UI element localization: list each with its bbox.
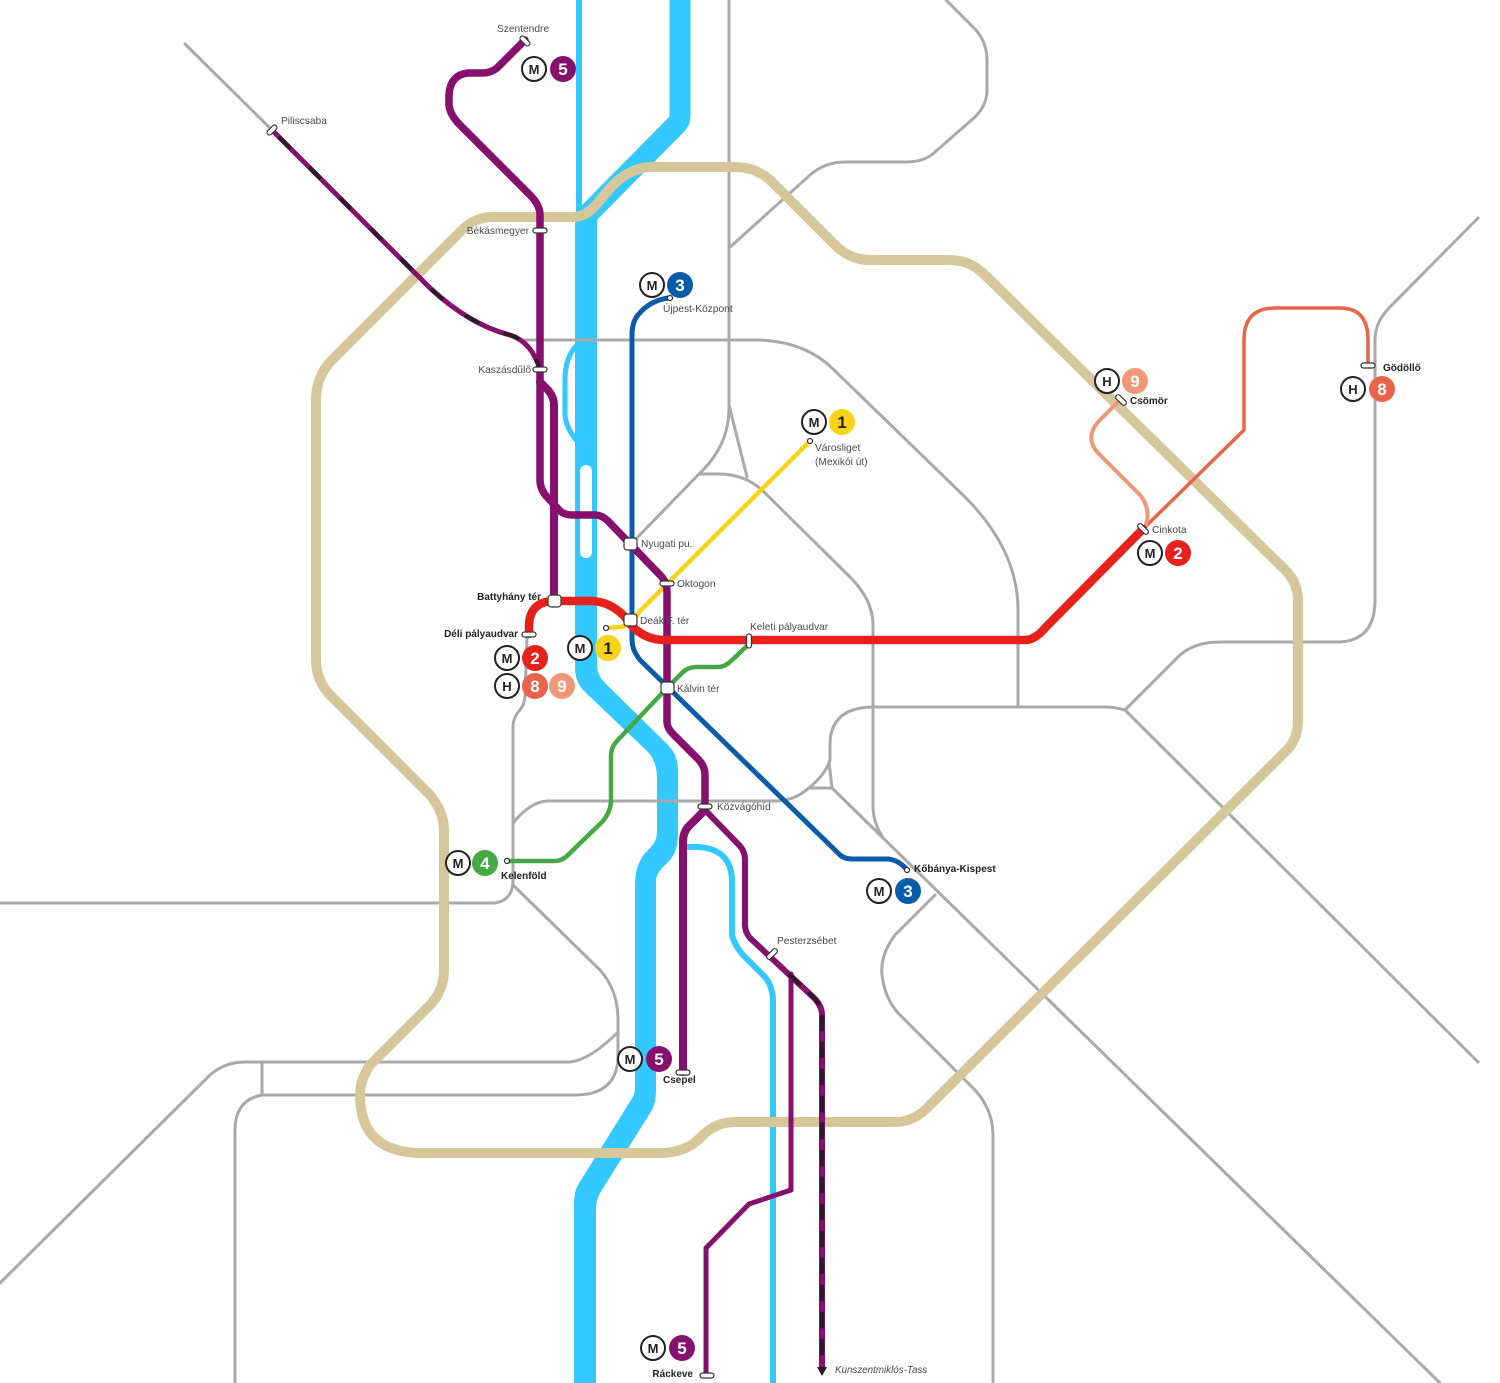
station labels: Kőbánya-Kispest — [914, 864, 996, 875]
station labels: Oktogon — [677, 579, 716, 590]
line H8: suburban railway to Gödöllő — [1143, 308, 1368, 529]
station labels: Gödöllő — [1383, 363, 1421, 374]
badge: M2 Cinkota: 2 — [1173, 544, 1183, 563]
badge: H8 Gödöllő: 8 — [1377, 380, 1387, 399]
station labels: Csepel — [663, 1075, 696, 1086]
badge: H8 Gödöllő — [1341, 376, 1395, 402]
station labels: Újpest-Központ — [663, 302, 733, 315]
station labels: Csömör — [1130, 396, 1168, 407]
line H9: suburban railway to Csömör — [1091, 400, 1148, 527]
badge: M1 Deák tér: M — [575, 641, 585, 656]
badge: M2 Déli pályaudvar: 2 — [530, 649, 540, 668]
line M4: green metro — [507, 645, 748, 861]
ring: tan outer motorway ring — [316, 167, 1298, 1153]
station labels: Piliscsaba — [281, 116, 327, 127]
badge: H9 Csömör: H — [1102, 374, 1112, 389]
station labels: Kálvin tér — [677, 684, 720, 695]
badge: H8 H9 Déli pályaudvar: 8 — [530, 677, 540, 696]
badge: M4 Kelenföld — [446, 850, 498, 876]
badge: M3 Újpest — [640, 272, 693, 298]
station labels: Szentendre — [497, 24, 549, 35]
badge: M5 Ráckeve — [641, 1335, 695, 1361]
badge: M1 Deák tér — [568, 635, 621, 661]
badge: H8 Gödöllő: H — [1348, 382, 1358, 397]
badge: M3 Újpest: M — [647, 278, 657, 293]
badge: M1 Városliget: 1 — [837, 413, 847, 432]
station labels: Keleti pályaudvar — [750, 622, 829, 633]
badge: M5 Ráckeve: 5 — [677, 1339, 687, 1358]
dashes: dark overlay on shared tracks — [280, 138, 822, 1365]
line M3: blue metro — [632, 298, 907, 870]
line M2: red metro — [529, 529, 1143, 640]
station labels: Pesterzsébet — [777, 936, 837, 947]
badge: M3 Kőbánya-Kispest: 3 — [903, 882, 913, 901]
station labels: Békásmegyer — [467, 226, 530, 237]
badge: H9 Csömör: 9 — [1130, 372, 1140, 391]
badge: H8 H9 Déli pályaudvar: 9 — [557, 677, 567, 696]
badge: M2 Déli pályaudvar: M — [502, 651, 512, 666]
badge: M3 Kőbánya-Kispest: M — [874, 884, 884, 899]
badge: M2 Cinkota — [1138, 540, 1191, 566]
badge: M3 Újpest: 3 — [675, 276, 685, 295]
line M5: purple HÉV main route — [272, 40, 822, 1373]
badge: M2 Déli pályaudvar — [495, 645, 548, 671]
station labels: Kunszentmiklós-Tass — [835, 1365, 927, 1376]
badge: M5 Csepel: 5 — [654, 1050, 664, 1069]
badge: M1 Városliget: M — [809, 415, 819, 430]
line M1: yellow metro — [606, 441, 810, 628]
badge: M5 Csepel: M — [625, 1052, 635, 1067]
arrow: towards Kunszentmiklós-Tass — [817, 1367, 827, 1376]
station labels: Cinkota — [1152, 525, 1187, 536]
badge: H8 H9 Déli pályaudvar: H — [502, 679, 512, 694]
station labels: Ráckeve — [652, 1369, 693, 1380]
station labels: Déli pályaudvar — [444, 629, 518, 640]
badge: M2 Cinkota: M — [1145, 546, 1155, 561]
badge: M5 Csepel — [618, 1046, 672, 1072]
badge: M3 Kőbánya-Kispest — [867, 878, 921, 904]
station labels: Kaszásdűlő — [478, 365, 531, 376]
station labels: Közvágóhíd — [717, 802, 771, 813]
station labels: Deák F. tér — [640, 616, 690, 627]
badge: M1 Városliget — [802, 409, 855, 435]
badge: H9 Csömör — [1095, 368, 1148, 394]
badge: M4 Kelenföld: M — [453, 856, 463, 871]
badge: M4 Kelenföld: 4 — [480, 854, 490, 873]
badge: M5 Szentendre: M — [529, 62, 539, 77]
station labels: Nyugati pu. — [641, 539, 693, 550]
station labels: Battyhány tér — [477, 592, 541, 603]
stations: terminal and interchange markers — [266, 35, 1375, 1378]
badge: M5 Ráckeve: M — [648, 1341, 658, 1356]
badge: M5 Szentendre: 5 — [558, 60, 568, 79]
station labels: Kelenföld — [501, 871, 547, 882]
badge: H8 H9 Déli pályaudvar — [495, 673, 575, 699]
station labels: Városliget — [815, 443, 860, 454]
river: Danube with branches and island — [565, 0, 773, 1383]
station labels: (Mexikói út) — [815, 457, 868, 468]
badge: M5 Szentendre — [522, 56, 576, 82]
badge: M1 Deák tér: 1 — [603, 639, 613, 658]
station labels — [281, 24, 1421, 1380]
